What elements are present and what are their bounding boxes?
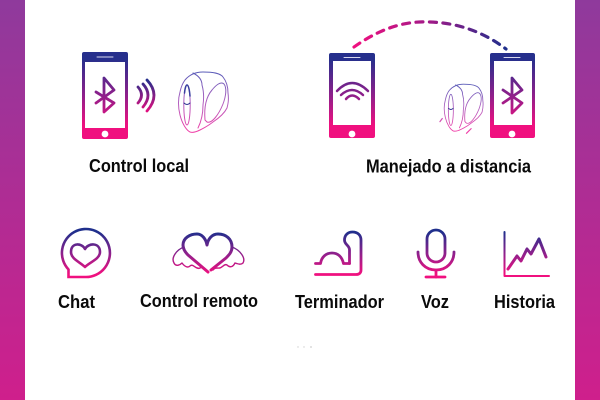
icon: line chart [504, 232, 549, 276]
panel: remote control [329, 22, 535, 176]
faint dots [297, 346, 312, 348]
icon: winged heart [173, 234, 244, 272]
icon: flexed arm [316, 232, 361, 274]
label: Chat: Chat [58, 292, 95, 312]
feature: remote control [140, 234, 258, 311]
icon: phone with wifi [329, 53, 375, 138]
icon: ring device with vibration [440, 84, 483, 133]
icon: microphone [418, 230, 454, 277]
icon: chat bubble with heart [62, 229, 110, 277]
label: Control remoto: Control remoto [140, 291, 258, 311]
feature: chat [58, 229, 110, 312]
icon: signal waves [138, 80, 154, 111]
label: Terminador: Terminador [295, 292, 384, 312]
icon: phone with bluetooth [490, 53, 535, 138]
right side bar [575, 0, 600, 400]
label: Historia: Historia [494, 292, 556, 312]
feature: voice [418, 230, 454, 312]
feature: terminator [295, 232, 384, 312]
feature: history [494, 232, 556, 312]
icon: ring device [178, 72, 228, 132]
panel: local control [82, 52, 228, 176]
icon: phone with bluetooth [82, 52, 128, 139]
label: Voz: Voz [421, 292, 449, 312]
heading: Manejado a distancia: Manejado a distancia [366, 156, 532, 176]
left side bar [0, 0, 25, 400]
arrow: dashed arc between phones [354, 22, 506, 49]
heading: Control local: Control local [89, 156, 189, 176]
